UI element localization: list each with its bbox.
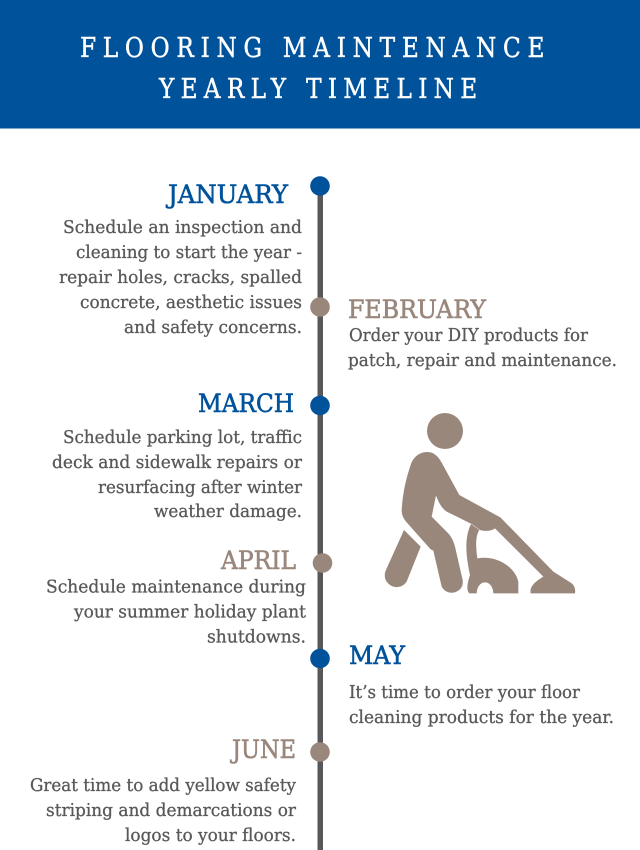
April entry: shutdowns. — [207, 626, 306, 648]
March entry: resurfacing after winter — [98, 477, 302, 498]
June entry — [30, 735, 297, 846]
May entry: cleaning products for the year. — [349, 707, 614, 728]
May entry — [349, 641, 614, 728]
timeline spine — [318, 186, 323, 850]
header banner — [0, 0, 640, 128]
January entry: repair holes, cracks, spalled — [59, 267, 302, 288]
icon: person vacuuming — [385, 413, 575, 593]
timeline marker: May — [310, 649, 330, 668]
June entry: striping and demarcations or — [46, 800, 296, 821]
March entry: Schedule parking lot, traffic — [63, 427, 302, 448]
February entry: Order your DIY products for — [349, 325, 588, 346]
January entry: Schedule an inspection and — [63, 217, 302, 238]
June entry: logos to your floors. — [125, 825, 296, 846]
February entry: patch, repair and maintenance. — [348, 350, 617, 371]
title: FLOORING MAINTENANCE — [80, 32, 544, 63]
timeline marker: April — [313, 553, 332, 573]
January entry: cleaning to start the year - — [76, 242, 302, 263]
April entry: APRIL — [220, 546, 296, 575]
April entry: Schedule maintenance during — [46, 576, 306, 598]
March entry — [52, 389, 302, 522]
January entry: and safety concerns. — [124, 317, 302, 338]
March entry: deck and sidewalk repairs or — [52, 452, 302, 473]
May entry: MAY — [349, 641, 405, 670]
January entry: concrete, aesthetic issues — [80, 292, 302, 313]
title: YEARLY TIMELINE — [158, 73, 477, 104]
February entry — [348, 295, 617, 371]
January entry — [59, 180, 302, 338]
June entry: Great time to add yellow safety — [30, 775, 297, 796]
March entry: weather damage. — [154, 501, 302, 522]
timeline marker: June — [310, 742, 330, 762]
timeline marker: February — [310, 297, 330, 317]
April entry — [46, 546, 307, 648]
April entry: your summer holiday plant — [73, 602, 307, 622]
timeline marker: March — [310, 396, 330, 415]
February entry: FEBRUARY — [348, 295, 486, 324]
May entry: It’s time to order your floor — [349, 682, 580, 703]
March entry: MARCH — [198, 389, 294, 418]
title — [80, 32, 544, 104]
January entry: JANUARY — [165, 180, 288, 209]
June entry: JUNE — [229, 735, 296, 764]
timeline marker: January — [310, 176, 330, 196]
